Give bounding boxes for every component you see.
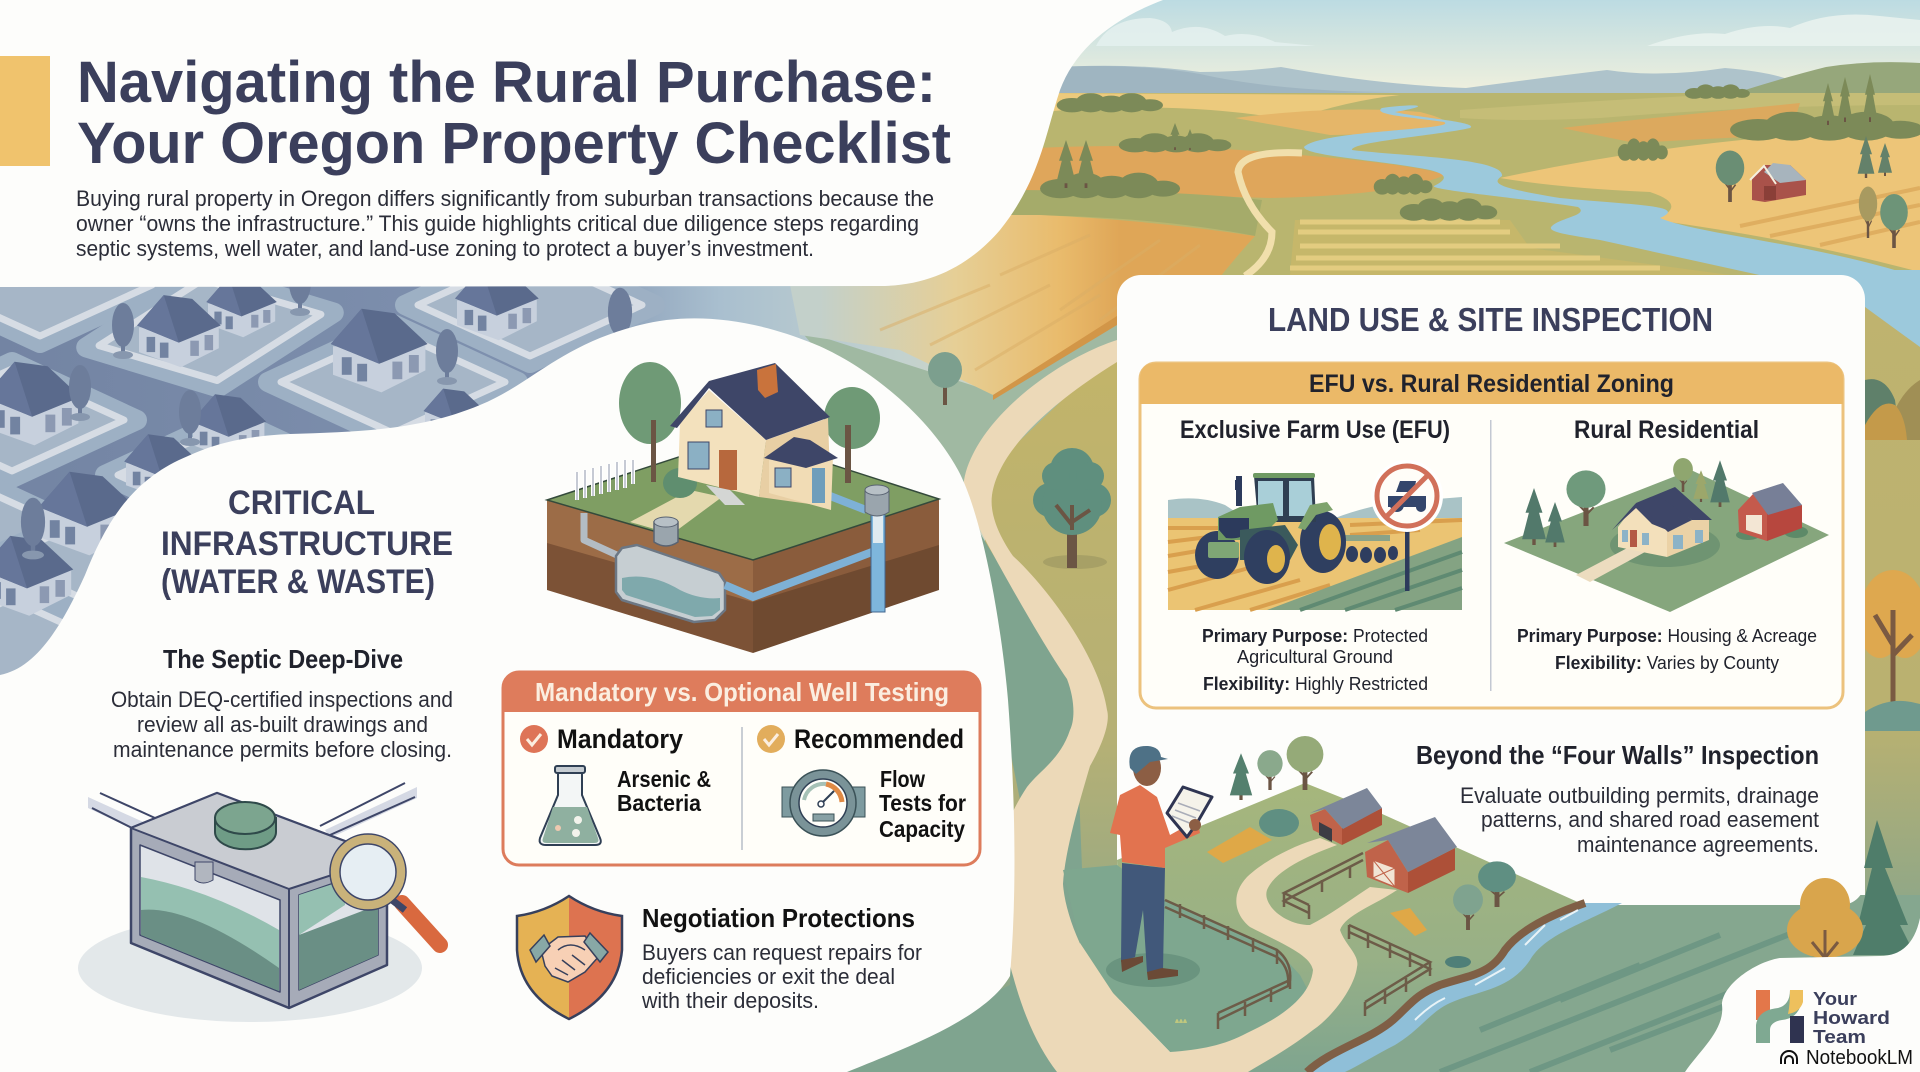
arsenic and bacteria label	[617, 766, 711, 816]
intro text: septic systems, well water, and land-use zoning to protect a buyer’s investment.	[76, 236, 814, 261]
negotiation protections text: with their deposits.	[641, 988, 819, 1013]
negotiation protections text: Negotiation Protections	[642, 903, 915, 933]
right edge landscape strip	[1860, 270, 1920, 967]
suburban neighborhood background	[0, 227, 1000, 708]
heading: critical infrastructure: CRITICAL	[228, 484, 375, 522]
EFU details: Primary Purpose: Protected	[1202, 625, 1428, 646]
the septic deep-dive text: Obtain DEQ-certified inspections and	[111, 687, 453, 712]
icon: rural residential lot	[1504, 458, 1829, 612]
fences	[1165, 853, 1430, 1029]
the septic deep-dive text	[111, 644, 453, 762]
thin farm road	[1238, 153, 1302, 276]
divider	[1490, 420, 1492, 691]
title accent bar	[0, 56, 50, 166]
logo: NotebookLM: NotebookLM	[1806, 1047, 1913, 1069]
small tree near field	[928, 352, 962, 405]
negotiation protections text	[641, 903, 922, 1013]
intro text: owner “owns the infrastructure.” This guide highlights critical due diligence steps regarding	[76, 211, 919, 236]
beyond the four walls block: Beyond the “Four Walls” Inspection	[1416, 740, 1819, 770]
icon: flask	[540, 766, 601, 845]
flow tests label	[879, 766, 966, 842]
beyond the four walls block: maintenance agreements.	[1577, 832, 1819, 857]
landscape: sky and mountains	[1040, 0, 1920, 100]
large barn	[1365, 840, 1408, 893]
hay bales	[1207, 827, 1272, 863]
zoning header bar	[1140, 363, 1843, 404]
beyond the four walls block	[1416, 740, 1819, 857]
middle landscape behind the road	[790, 215, 1255, 1072]
negotiation protections text: Buyers can request repairs for	[642, 940, 922, 965]
landscape: rolling fields	[1000, 93, 1920, 325]
EFU details	[1202, 625, 1428, 694]
title: Your Oregon Property Checklist	[77, 111, 951, 176]
heading: critical infrastructure: INFRASTRUCTURE	[161, 525, 453, 563]
the septic deep-dive text: maintenance permits before closing.	[113, 737, 452, 762]
logo: Your Howard Team	[1756, 989, 1890, 1047]
arsenic and bacteria label: Arsenic &	[617, 766, 711, 792]
farm field below panel	[1300, 895, 1920, 1072]
landscape: tree lines	[1040, 74, 1920, 221]
icon: flow gauge	[782, 770, 865, 836]
septic tank	[584, 513, 872, 622]
icon: mandatory check	[520, 725, 548, 753]
intro text: Buying rural property in Oregon differs significantly from suburban transactions because the	[76, 186, 934, 211]
recommended label: Recommended	[794, 724, 964, 754]
title	[77, 50, 951, 176]
small barn	[1310, 809, 1342, 845]
flow tests label: Capacity	[879, 816, 965, 842]
panel: land use and site inspection background	[1117, 275, 1865, 905]
rural residential details	[1517, 625, 1817, 673]
flow tests label: Tests for	[879, 790, 966, 816]
logo: Your Howard Team: Howard	[1813, 1008, 1890, 1028]
tree in middle landscape	[1033, 448, 1111, 569]
EFU details: Agricultural Ground	[1237, 646, 1393, 667]
flow tests label: Flow	[880, 766, 925, 792]
logo: Your Howard Team: Team	[1813, 1027, 1866, 1047]
farm driveway	[1080, 838, 1397, 1072]
rural residential details: Primary Purpose: Housing & Acreage	[1517, 625, 1817, 646]
icon: tractor in field with prohibited sign	[1168, 460, 1462, 610]
fence	[577, 460, 633, 500]
illustration: inspector with clipboard	[1106, 746, 1212, 987]
river beside farm	[1307, 903, 1622, 1072]
house	[678, 390, 766, 497]
divider	[741, 727, 743, 850]
well pipe	[871, 513, 885, 612]
rural residential column heading: Rural Residential	[1574, 416, 1759, 444]
beyond the four walls block: Evaluate outbuilding permits, drainage	[1460, 783, 1819, 808]
EFU column heading: Exclusive Farm Use (EFU)	[1180, 416, 1450, 444]
EFU details: Flexibility: Highly Restricted	[1203, 673, 1428, 694]
heading: critical infrastructure: (WATER & WASTE)	[161, 563, 435, 601]
farm hillside scene	[1063, 736, 1622, 1072]
panel: mandatory vs optional well testing	[503, 672, 980, 865]
heading: land use and site inspection: LAND USE & SITE INSPECTION	[1268, 301, 1713, 338]
septic trees	[651, 410, 656, 482]
main winding dirt road	[963, 340, 1180, 1072]
white title shape	[0, 0, 1163, 287]
icon: shield with handshake	[517, 896, 622, 1019]
arsenic and bacteria label: Bacteria	[617, 790, 701, 816]
title: Navigating the Rural Purchase:	[77, 50, 936, 115]
panel: EFU vs rural residential zoning	[1140, 363, 1843, 708]
rural residential details: Flexibility: Varies by County	[1555, 652, 1780, 673]
white content shape: water and waste section	[0, 318, 1014, 1072]
negotiation protections text: deficiencies or exit the deal	[642, 964, 895, 989]
heading: critical infrastructure	[161, 484, 453, 601]
trees by the farm field	[1787, 820, 1915, 958]
well testing header text: Mandatory vs. Optional Well Testing	[535, 677, 949, 707]
white corner shape behind logo	[1685, 918, 1920, 1072]
intro text	[76, 186, 934, 261]
illustration: septic tank with magnifier	[78, 783, 440, 1022]
mandatory label: Mandatory	[557, 724, 683, 754]
icon: recommended check	[757, 725, 785, 753]
zoning header text: EFU vs. Rural Residential Zoning	[1309, 370, 1674, 398]
logo: Your Howard Team: Your	[1813, 989, 1857, 1009]
beyond the four walls block: patterns, and shared road easement	[1481, 807, 1819, 832]
landscape: river	[1304, 105, 1920, 350]
well testing header bar	[503, 672, 980, 712]
illustration: house with septic cutaway	[547, 362, 939, 653]
the septic deep-dive text: review all as-built drawings and	[137, 712, 428, 737]
landscape: red barn and trees	[1716, 136, 1908, 248]
the septic deep-dive text: The Septic Deep-Dive	[163, 644, 403, 674]
